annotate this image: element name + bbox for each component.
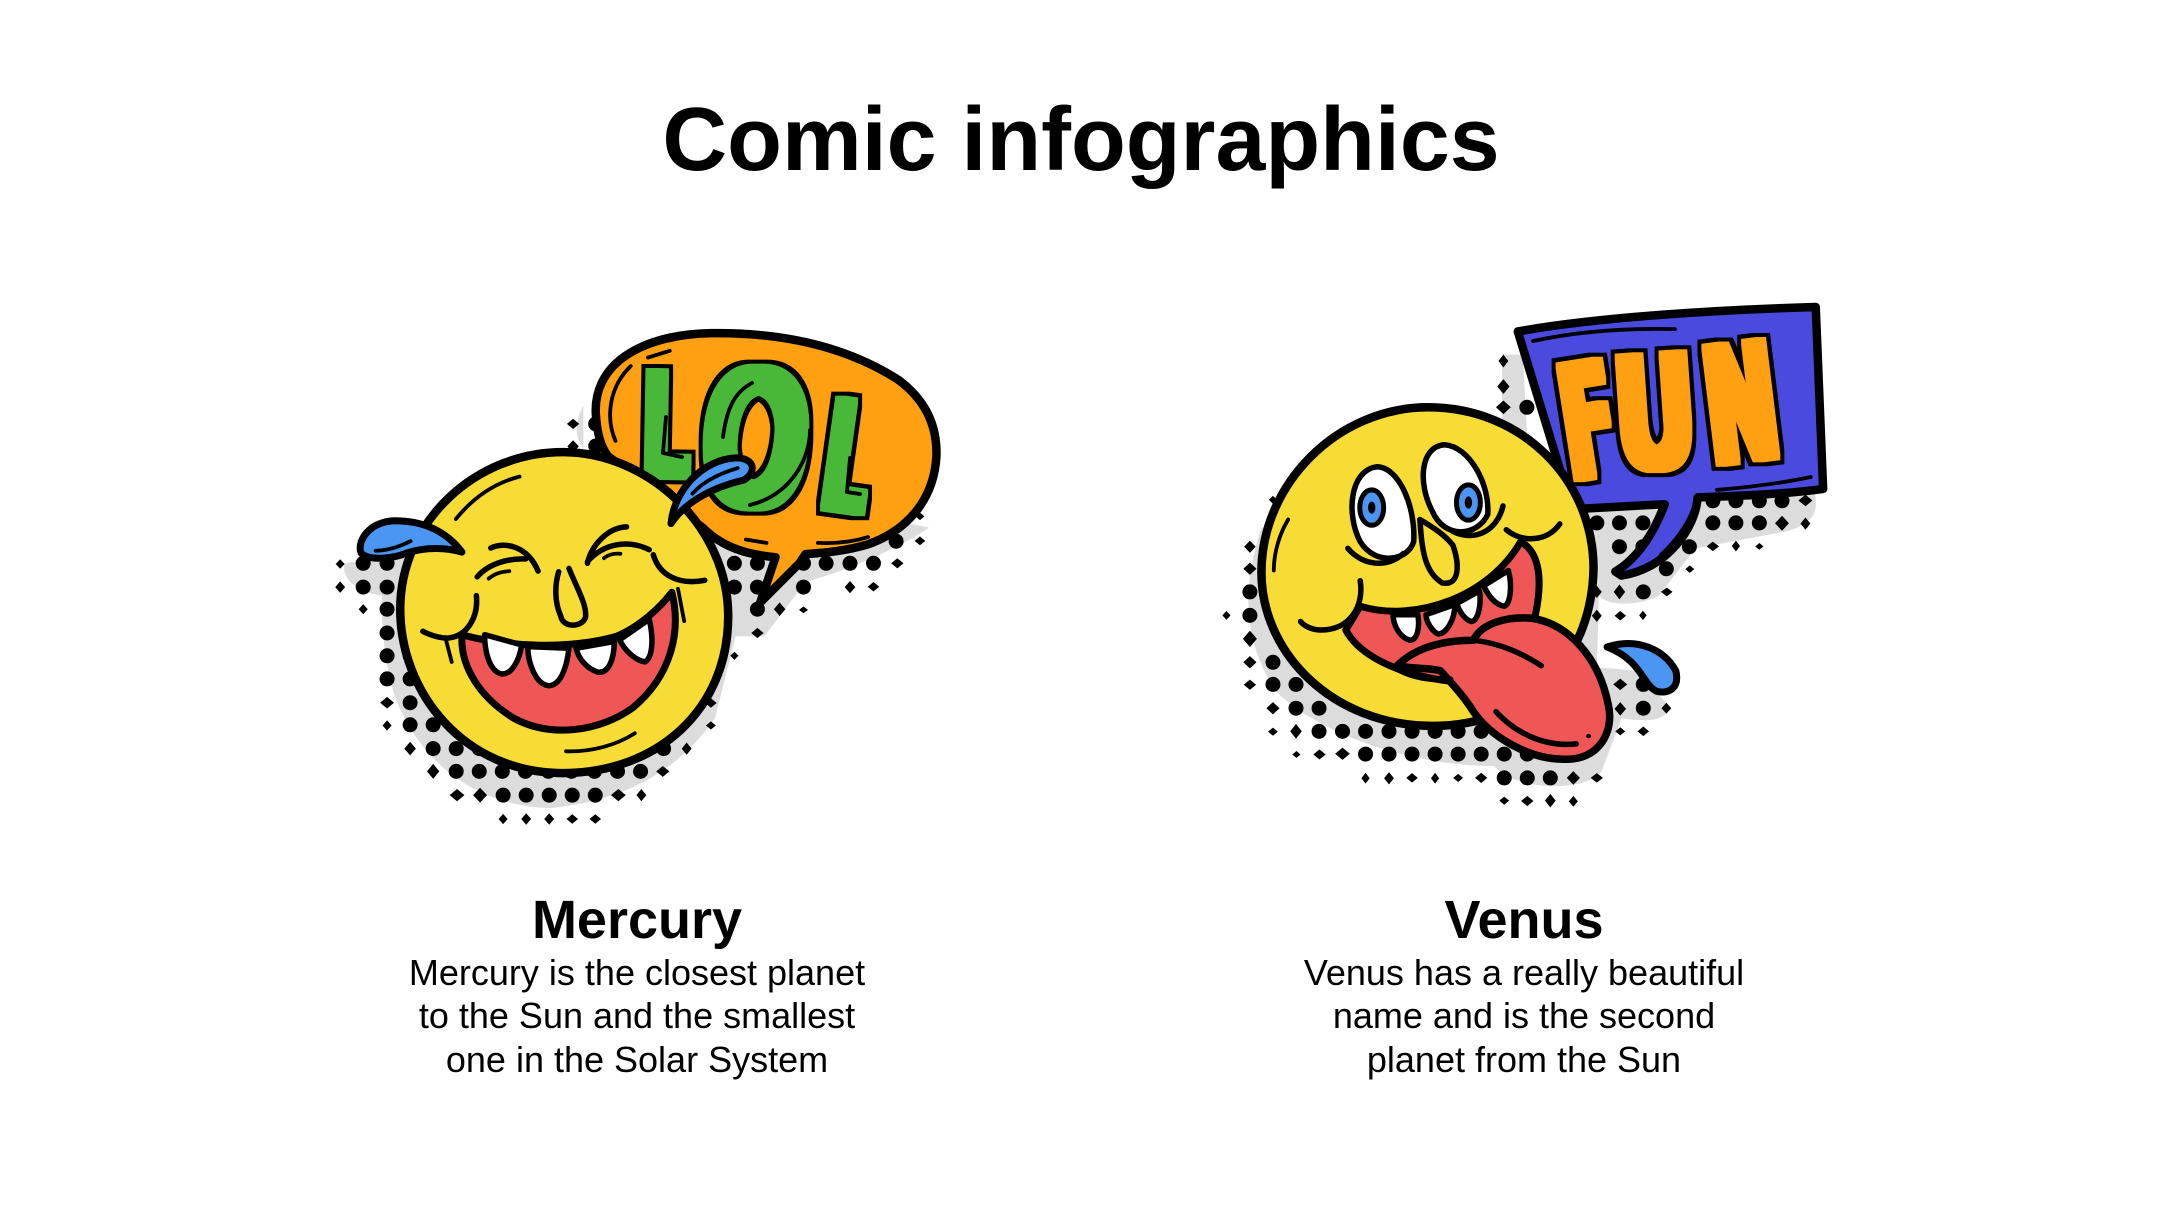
halftone shadow bbox=[335, 405, 929, 825]
text: Venus description bbox=[1304, 952, 1744, 1080]
drop bbox=[1607, 644, 1677, 692]
text: Venus description: name and is the second bbox=[1333, 995, 1715, 1036]
text: Mercury description: to the Sun and the smallest bbox=[419, 995, 855, 1036]
tear right bbox=[671, 458, 752, 524]
lettering: FUN: F bbox=[1549, 328, 1628, 518]
tongue bbox=[1397, 618, 1610, 759]
text: Mercury description: one in the Solar System bbox=[446, 1039, 828, 1080]
lettering: LOL: O bbox=[692, 327, 819, 555]
eyes bbox=[1352, 445, 1488, 558]
teeth bbox=[485, 619, 652, 686]
illustration: laughing emoji with LOL bubble bbox=[335, 327, 936, 825]
mouth bbox=[462, 592, 675, 730]
text: Mercury description bbox=[409, 952, 865, 1080]
halftone shadow bbox=[1222, 355, 1816, 807]
text: Mercury description: Mercury is the closest planet bbox=[409, 952, 865, 993]
teeth bbox=[1393, 570, 1510, 640]
face bbox=[400, 452, 728, 773]
heading: Venus: Venus bbox=[1444, 890, 1604, 950]
speech bubble bbox=[1518, 307, 1823, 576]
tear left bbox=[360, 521, 462, 558]
speech bubble bbox=[596, 333, 936, 602]
lettering: LOL bbox=[641, 327, 881, 555]
title: Comic infographics bbox=[662, 90, 1500, 190]
heading: Mercury: Mercury bbox=[532, 890, 742, 950]
eyes, nose, cheeks bbox=[423, 527, 705, 638]
lettering: LOL: L bbox=[814, 368, 881, 549]
lettering: FUN bbox=[1549, 308, 1788, 518]
mouth bbox=[1346, 542, 1539, 681]
highlights bbox=[446, 477, 684, 751]
lettering: FUN: U bbox=[1608, 320, 1702, 508]
face bbox=[1261, 407, 1594, 726]
text: Venus description: Venus has a really beautiful bbox=[1304, 952, 1744, 993]
lettering: LOL: L bbox=[641, 344, 690, 513]
illustration: tongue-out emoji with FUN bubble bbox=[1222, 307, 1823, 807]
text: Venus description: planet from the Sun bbox=[1367, 1039, 1681, 1080]
nose, cheeks, lids bbox=[1420, 520, 1457, 583]
lettering: FUN: N bbox=[1695, 308, 1788, 503]
